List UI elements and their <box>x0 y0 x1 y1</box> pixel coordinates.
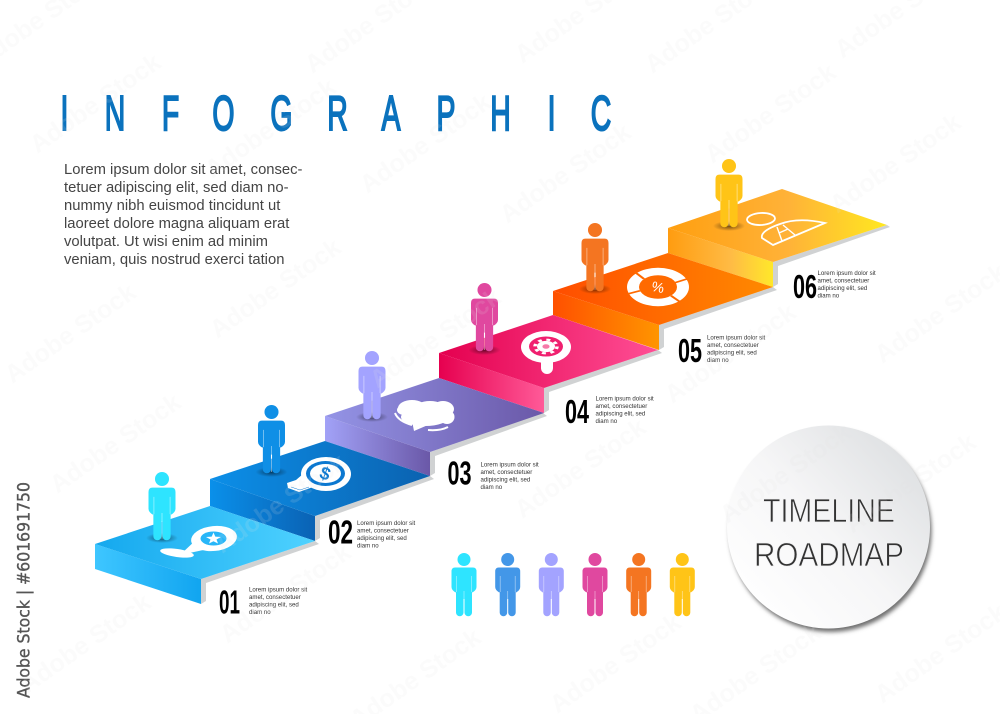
step label 02: adipiscing elit, sed <box>357 535 407 542</box>
step label 02: diam no <box>357 542 379 550</box>
intro paragraph: laoreet dolore magna aliquam erat <box>64 216 289 232</box>
legend person orange <box>626 553 651 616</box>
watermark pattern: Adobe Stock <box>205 233 346 344</box>
icon: light bulb with dollar: $ <box>317 462 333 485</box>
watermark pattern: Adobe Stock <box>365 283 506 394</box>
icon: user outline <box>747 212 825 245</box>
icon: light bulb with dollar <box>287 457 351 492</box>
step label 03: Lorem ipsum dolor sit <box>480 461 539 468</box>
step label 02: Lorem ipsum dolor sit <box>357 520 416 527</box>
timeline roadmap badge <box>727 426 932 632</box>
step label 04: adipiscing elit, sed <box>596 410 645 418</box>
watermark pattern: Adobe Stock <box>510 413 651 524</box>
step label 01: diam no <box>249 609 271 616</box>
step 2 <box>210 441 434 541</box>
step 3 <box>325 378 547 476</box>
icon: percent ring: % <box>650 278 666 296</box>
step label 05: 05 <box>678 332 702 369</box>
step label 05: diam no <box>707 357 729 364</box>
person shadows <box>146 221 745 543</box>
watermark pattern: Adobe Stock <box>215 538 356 649</box>
watermark pattern: Adobe Stock <box>715 418 856 529</box>
person on step 3 <box>358 351 386 419</box>
title: INFOGRAPHIC <box>61 87 611 141</box>
icon: cloud <box>395 400 454 431</box>
step label 04 <box>565 393 654 430</box>
step label 01: Lorem ipsum dolor sit <box>249 586 308 594</box>
watermark pattern: Adobe Stock <box>825 108 966 219</box>
person on step 6 <box>716 159 742 227</box>
step label 01 <box>219 584 308 620</box>
step 5 <box>553 253 777 350</box>
watermark pattern: Adobe Stock <box>660 298 801 409</box>
legend person yellow <box>670 553 695 616</box>
step label 01: 01 <box>219 584 240 620</box>
step label 03 <box>448 454 539 492</box>
intro paragraph: nummy nibh euismod tincidunt ut <box>64 198 280 214</box>
step label 05: Lorem ipsum dolor sit <box>707 334 766 342</box>
step label 06: 06 <box>793 268 817 305</box>
watermark pattern: Adobe Stock <box>25 48 166 159</box>
legend person blue <box>495 553 520 616</box>
step label 02: amet, consectetuer <box>357 528 409 534</box>
icon: percent ring <box>627 268 689 306</box>
person on step 1 <box>148 472 176 540</box>
step 6 <box>668 189 890 287</box>
legend person pink <box>582 553 608 616</box>
watermark pattern: Adobe Stock <box>0 278 141 389</box>
watermark pattern: Adobe Stock <box>200 73 341 184</box>
step label 05: adipiscing elit, sed <box>707 350 757 356</box>
intro paragraph: tetuer adipiscing elit, sed diam no- <box>64 180 289 196</box>
watermark pattern: Adobe Stock <box>210 448 351 559</box>
watermark pattern: Adobe Stock <box>15 588 156 699</box>
timeline roadmap badge: ROADMAP <box>754 537 904 574</box>
step label 04: 04 <box>565 393 589 430</box>
person on step 4 <box>471 283 498 351</box>
intro paragraph: Lorem ipsum dolor sit amet, consec- <box>64 162 303 178</box>
step 4 <box>439 315 662 413</box>
step label 06: diam no <box>818 292 840 300</box>
legend people row <box>452 553 695 616</box>
legend person cyan <box>452 553 476 616</box>
person on step 5 <box>582 223 608 291</box>
step label 02 <box>328 514 416 550</box>
legend person lavender <box>539 553 564 616</box>
icon: location pin with star <box>160 524 238 559</box>
step label 04: diam no <box>596 418 618 425</box>
staircase <box>95 189 890 604</box>
step label 03: diam no <box>480 484 503 491</box>
watermark pattern: Adobe Stock <box>45 388 186 499</box>
intro paragraph: volutpat. Ut wisi enim ad minim <box>64 234 268 250</box>
step label 05 <box>678 332 766 369</box>
watermark pattern: Adobe Stock <box>355 88 496 199</box>
person on step 2 <box>258 405 285 473</box>
step label 03: 03 <box>448 454 472 492</box>
icon: magnifier with gear <box>521 331 571 374</box>
step label 06: adipiscing elit, sed <box>818 285 867 292</box>
step label 01: amet, consectetuer <box>249 594 301 601</box>
step label 02: 02 <box>328 514 353 550</box>
step label 03: amet, consectetuer <box>480 469 532 476</box>
watermark pattern: Adobe Stock <box>495 118 636 229</box>
watermark pattern: Adobe Stock <box>840 428 981 539</box>
stock credit: Adobe Stock | #601691750 <box>14 482 34 698</box>
intro paragraph <box>64 162 303 268</box>
watermark pattern: Adobe Stock <box>700 58 841 169</box>
step label 06: amet, consectetuer <box>818 278 869 284</box>
step 1 <box>95 506 319 604</box>
step label 01: adipiscing elit, sed <box>249 602 299 608</box>
step label 06 <box>793 268 876 305</box>
step label 04: amet, consectetuer <box>596 403 647 410</box>
timeline roadmap badge: TIMELINE <box>763 493 895 530</box>
intro paragraph: veniam, quis nostrud exerci tation <box>64 252 284 268</box>
step label 05: amet, consectetuer <box>707 342 759 349</box>
step label 06: Lorem ipsum dolor sit <box>818 270 876 277</box>
step label 03: adipiscing elit, sed <box>480 476 530 483</box>
step label 04: Lorem ipsum dolor sit <box>596 396 654 402</box>
